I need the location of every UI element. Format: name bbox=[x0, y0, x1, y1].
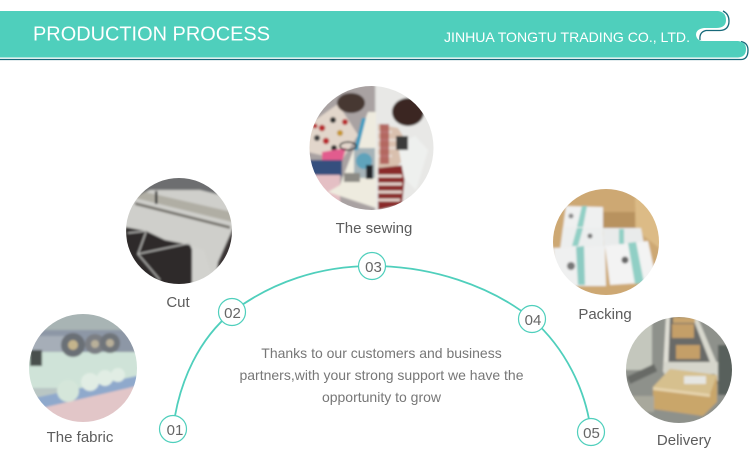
photo: sewing workers bbox=[310, 86, 434, 210]
label: cut: Cut bbox=[166, 294, 191, 311]
central message: partners,with your strong support we have the bbox=[239, 367, 524, 383]
label: delivery: Delivery bbox=[657, 432, 712, 449]
label: the fabric: The fabric bbox=[47, 429, 114, 446]
label: the sewing: The sewing bbox=[336, 220, 412, 237]
photo: delivery conveyor bbox=[626, 317, 732, 423]
photo: cutting machine bbox=[126, 178, 232, 284]
step 01: 01 bbox=[167, 422, 183, 439]
arc timeline bbox=[173, 266, 591, 432]
step 04: 04 bbox=[525, 312, 541, 329]
step 04 bbox=[518, 306, 546, 332]
step 02: 02 bbox=[224, 305, 241, 322]
central message: Thanks to our customers and business bbox=[261, 345, 502, 361]
central message bbox=[239, 345, 524, 405]
label: packing: Packing bbox=[578, 306, 632, 323]
step 01 bbox=[160, 416, 186, 442]
step 02 bbox=[218, 298, 246, 326]
company name: JINHUA TONGTU TRADING CO., LTD. bbox=[444, 29, 690, 45]
banner title: PRODUCTION PROCESS bbox=[33, 24, 270, 46]
central message: opportunity to grow bbox=[322, 389, 442, 405]
step 05: 05 bbox=[583, 425, 600, 442]
step 03 bbox=[358, 252, 386, 280]
header banner bbox=[0, 11, 748, 60]
step 03: 03 bbox=[365, 259, 382, 276]
photo: packing box bbox=[553, 189, 659, 295]
step 05 bbox=[578, 418, 604, 446]
photo: the fabric rolls bbox=[29, 314, 137, 422]
